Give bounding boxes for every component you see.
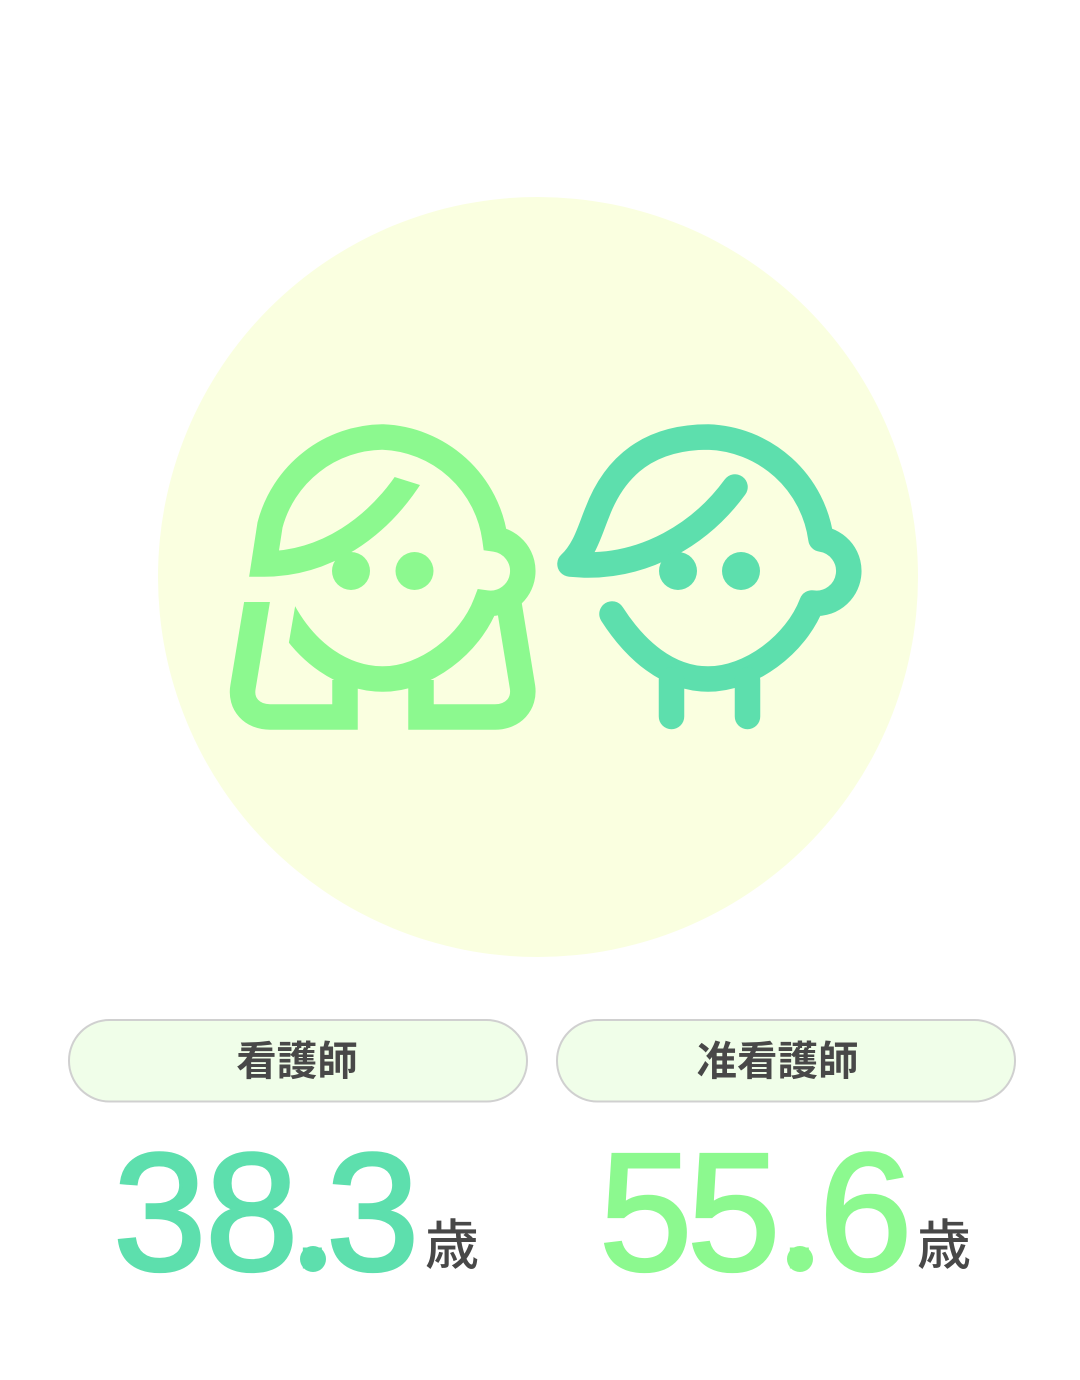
panel: assistant nurse [557,1020,1015,1306]
value: assistant nurse age: 55.6 [599,1115,912,1306]
icon: female nurse [243,437,523,717]
nurse right eye [396,552,434,590]
nurse left eye [332,552,370,590]
panel: nurse [69,1020,527,1306]
decimal point rounding [787,1246,813,1272]
nurse left arm [243,590,345,717]
decimal point rounding [300,1246,326,1272]
nurse right arm [421,604,523,717]
unit: 歳 [917,1216,971,1276]
pill label: nurse: 看護師 [236,1038,358,1084]
background circle [158,197,918,957]
assistant nurse right eye [722,552,760,590]
assistant nurse left eye [659,552,697,590]
value: nurse age: 38.3 [113,1115,419,1306]
assistant nurse right leg [735,680,760,716]
icon: male assistant nurse [570,437,849,716]
assistant nurse left leg [659,680,684,716]
infographic canvas [68,197,1016,1274]
pill label: assistant nurse: 准看護師 [696,1038,858,1084]
pill label: nurse [69,1020,527,1102]
assistant nurse head and hair [570,437,849,679]
unit: 歳 [425,1216,479,1276]
pill label: assistant nurse [557,1020,1015,1102]
nurse head and hair [264,437,523,679]
